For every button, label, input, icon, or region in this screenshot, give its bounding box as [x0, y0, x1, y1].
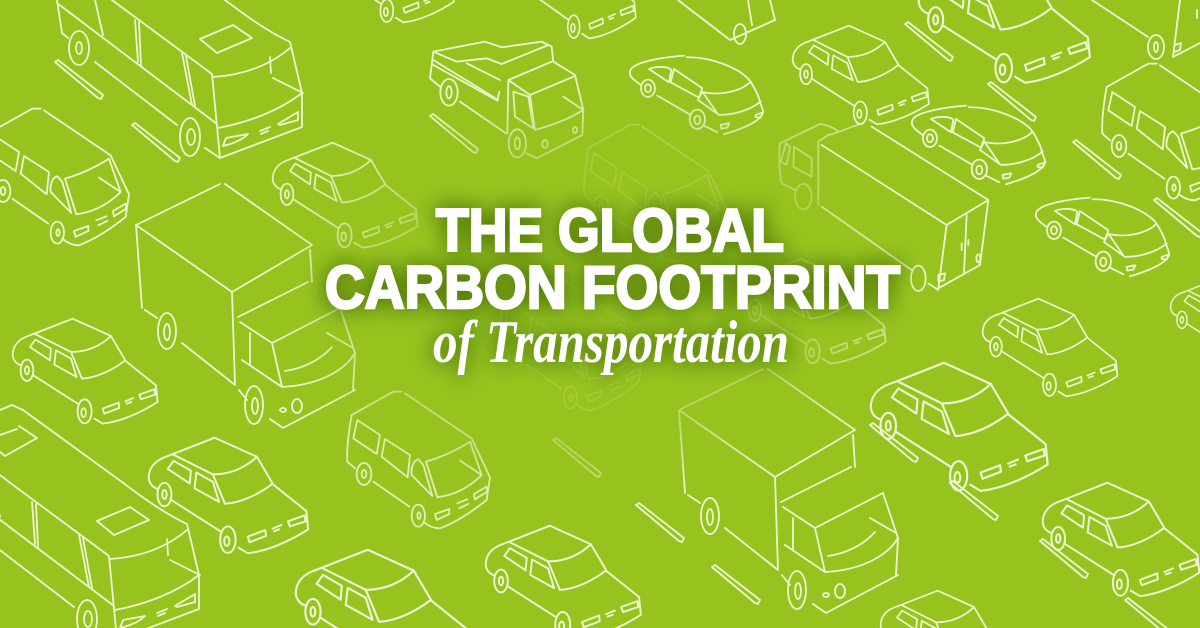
title block	[325, 197, 900, 375]
van: faded above title	[584, 125, 727, 261]
pickup truck: top centre	[430, 42, 583, 158]
truck: rear view right of centre	[779, 123, 988, 291]
truck: bottom centre	[679, 369, 898, 613]
van: top centre partial	[678, 0, 775, 44]
truck: left	[136, 184, 355, 428]
truck: top right partial	[1092, 0, 1200, 59]
van: right	[1102, 64, 1200, 200]
van: centre bottom	[347, 392, 490, 528]
bus: bottom left	[0, 405, 200, 628]
bus: top left	[57, 0, 303, 158]
central fade behind title	[255, 75, 945, 505]
title line 1: THE GLOBAL	[436, 197, 784, 264]
van: faded below title	[499, 274, 642, 410]
van: left	[0, 109, 129, 245]
title line 2: CARBON FOOTPRINT	[325, 254, 900, 321]
subtitle: of Transportation	[433, 309, 789, 375]
